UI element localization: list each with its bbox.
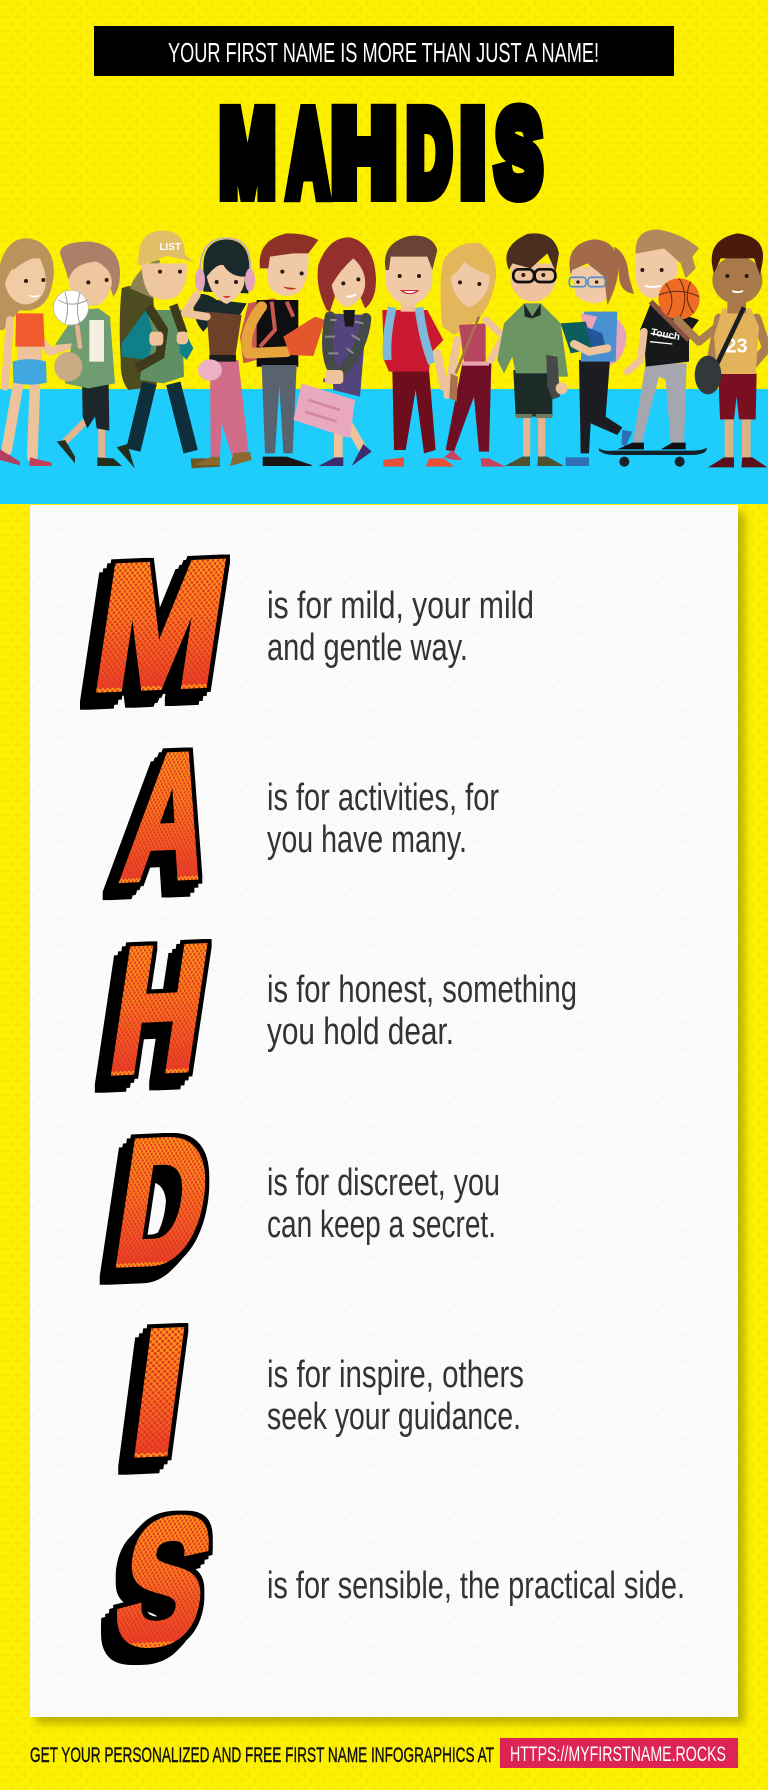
character: boy with basketball on skateboard: Touch <box>650 327 681 343</box>
footer url badge <box>500 1738 738 1768</box>
character: girl with headphones <box>185 238 255 466</box>
text: A line <box>267 777 499 861</box>
panel: name meanings <box>30 505 738 1717</box>
character: boy with tank top and shoulder bag: 23 <box>725 336 748 358</box>
character: girl with stripes and pink case <box>293 237 376 466</box>
character: boy with red shirt <box>382 236 454 467</box>
letter M: M <box>84 524 238 727</box>
footer call to action: GET YOUR PERSONALIZED AND FREE FIRST NAME INFOGRAPHICS AT <box>30 1743 494 1767</box>
text: M line: is for mild, your mild <box>267 585 534 627</box>
right six characters <box>382 229 767 467</box>
text: H line: you hold dear. <box>267 1011 454 1053</box>
text: D line <box>267 1162 500 1246</box>
text: H line <box>267 969 577 1053</box>
text: M line: and gentle way. <box>267 627 468 669</box>
character: girl with volleyball and green jacket <box>54 242 122 466</box>
character: boy with glasses and green sweater <box>497 233 568 466</box>
text: I line <box>267 1354 524 1438</box>
left six characters <box>0 231 376 468</box>
text: M line <box>267 585 534 669</box>
title: name: D <box>407 87 451 219</box>
letter A: A <box>114 717 222 917</box>
top banner <box>94 26 674 76</box>
title: name: H <box>332 88 396 220</box>
title: name <box>220 87 542 220</box>
text: I line: is for inspire, others <box>267 1354 524 1396</box>
text: A line: is for activities, for <box>267 777 499 819</box>
character: boy with tank top and shoulder bag <box>695 233 767 467</box>
letter S: S <box>102 1480 227 1681</box>
text: D line: can keep a secret. <box>267 1204 496 1246</box>
character: boy with cap and backpack <box>117 231 220 468</box>
text: H line: is for honest, something <box>267 969 577 1011</box>
character: boy with basketball on skateboard <box>599 229 717 467</box>
character: boy with cap and backpack: LIST <box>159 242 181 253</box>
text: A line: you have many. <box>267 819 467 861</box>
letter H: H <box>100 910 218 1110</box>
title: name: M <box>220 87 275 219</box>
text: I line: seek your guidance. <box>267 1396 521 1438</box>
title: name: S <box>496 88 542 219</box>
text: D line: is for discreet, you <box>267 1162 500 1204</box>
character: blonde girl with pink top <box>440 243 506 467</box>
group of people illustration <box>0 229 767 468</box>
character: girl with ponytail and tablet <box>561 239 634 466</box>
title: name: I <box>461 87 485 219</box>
title: name: A <box>288 87 328 219</box>
character: girl with orange top <box>0 238 75 466</box>
cyan floor band <box>0 389 768 504</box>
letter D: D <box>105 1102 221 1302</box>
letter I: I <box>122 1293 196 1492</box>
character: boy with red backpack and book <box>240 233 325 466</box>
panel shadow <box>36 512 745 1724</box>
